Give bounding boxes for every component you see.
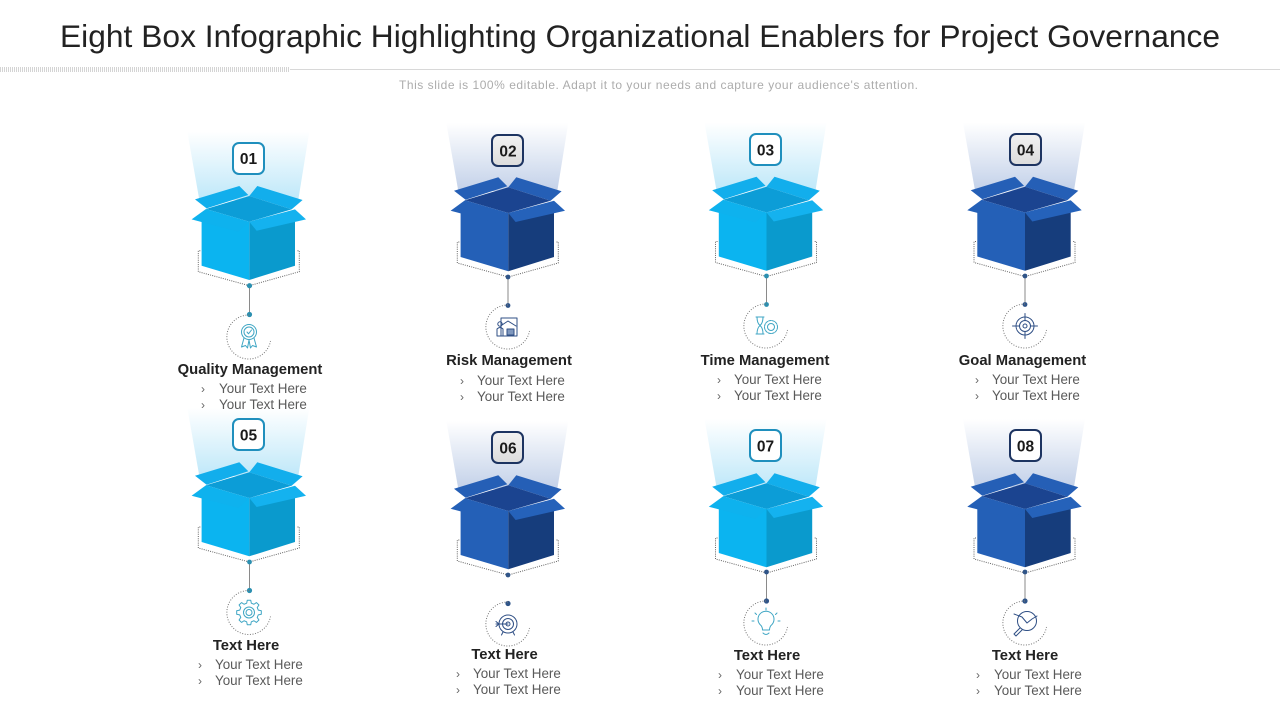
label 02: Risk Management — [446, 353, 572, 369]
label 05: Text Here — [213, 638, 279, 654]
list 01: › — [201, 382, 205, 396]
box 06 — [446, 421, 568, 575]
list 03: Your Text Here — [734, 388, 822, 403]
list 07: › — [718, 684, 722, 698]
list 05: Your Text Here — [215, 673, 303, 688]
list 07: › — [718, 668, 722, 682]
panel: 01 Quality Management — [178, 132, 322, 412]
list 03 — [717, 372, 822, 403]
label 06: Text Here — [471, 647, 538, 663]
list 06: Your Text Here — [473, 682, 561, 697]
badge 04: 04 — [1017, 142, 1034, 160]
badge 01 — [233, 143, 264, 174]
box 02 — [446, 123, 568, 277]
list 07: Your Text Here — [736, 667, 824, 682]
badge 05: 05 — [240, 428, 257, 444]
label 01: Quality Management — [178, 362, 322, 378]
connector 03 — [764, 274, 769, 307]
box 05 — [187, 408, 309, 562]
badge 02 — [492, 135, 523, 166]
list 02 — [460, 373, 565, 404]
box 04 — [963, 122, 1085, 276]
badge 06 — [492, 432, 523, 463]
connector 02 — [506, 275, 510, 308]
list 02: › — [460, 390, 464, 404]
icon: arrow target — [486, 602, 530, 646]
title: Eight Box Infographic Highlighting Organizational Enablers for Project Governance — [60, 18, 1220, 54]
label 04: Goal Management — [959, 353, 1086, 369]
panel: 07 Text Here — [704, 419, 826, 698]
box 07 — [704, 419, 826, 573]
badge 03: 03 — [757, 142, 774, 160]
badge 01: 01 — [240, 151, 257, 168]
list 01: Your Text Here — [219, 397, 307, 412]
list 05: › — [198, 658, 202, 672]
badge 08: 08 — [1017, 438, 1034, 456]
connector 07 — [764, 570, 769, 604]
icon: hourglass and gear — [744, 304, 788, 348]
connector 01 — [247, 283, 252, 317]
connector 04 — [1023, 274, 1027, 307]
box 03 — [704, 122, 826, 276]
badge 04 — [1010, 134, 1041, 165]
badge 02: 02 — [499, 144, 517, 160]
icon: risk chart with person — [486, 305, 530, 349]
list 08: › — [976, 668, 980, 682]
list 05 — [198, 657, 303, 688]
list 01 — [201, 381, 307, 412]
label 03: Time Management — [701, 353, 829, 369]
list 04: Your Text Here — [992, 372, 1080, 387]
icon: award ribbon — [227, 315, 270, 359]
list 05: › — [198, 674, 202, 688]
list 07 — [718, 667, 824, 698]
badge 05 — [233, 419, 264, 450]
label 08: Text Here — [992, 648, 1058, 664]
list 02: › — [460, 374, 464, 388]
badge 07 — [750, 430, 781, 461]
list 04 — [975, 372, 1080, 403]
icon: light bulb — [744, 601, 788, 645]
icon: gear — [227, 590, 270, 634]
badge 06: 06 — [499, 440, 517, 458]
badge 07: 07 — [757, 438, 774, 456]
list 04: › — [975, 373, 979, 387]
list 08: Your Text Here — [994, 683, 1082, 698]
list 08: › — [976, 684, 980, 698]
list 04: › — [975, 389, 979, 403]
list 03: › — [717, 373, 721, 387]
box 01 — [187, 132, 309, 286]
panel: 05 Text Here — [187, 408, 309, 688]
list 06: Your Text Here — [473, 666, 561, 681]
label 07: Text Here — [734, 648, 800, 664]
subtitle: This slide is 100% editable. Adapt it to your needs and capture your audience's attention. — [399, 78, 918, 92]
list 02: Your Text Here — [477, 389, 565, 404]
box 08 — [963, 419, 1085, 573]
list 03: Your Text Here — [734, 372, 822, 387]
list 06: › — [456, 683, 460, 697]
icon: magnifier with trend — [1003, 601, 1046, 645]
badge 08 — [1010, 430, 1041, 461]
badge 03 — [750, 134, 781, 165]
panel: 08 Text Here — [963, 419, 1085, 698]
connector 06 — [505, 573, 511, 606]
icon: crosshair target — [1003, 304, 1046, 348]
list 08 — [976, 667, 1082, 698]
connector 08 — [1022, 570, 1028, 604]
list 01: Your Text Here — [219, 381, 307, 396]
panel: 02 Risk Management — [446, 123, 572, 404]
list 08: Your Text Here — [994, 667, 1082, 682]
panel: 04 Goal Management — [959, 122, 1086, 403]
list 07: Your Text Here — [736, 683, 824, 698]
panel: 03 Time Management — [701, 122, 829, 403]
header rule — [0, 67, 1280, 72]
panel: 06 Text Here — [446, 421, 568, 697]
list 01: › — [201, 398, 205, 412]
list 05: Your Text Here — [215, 657, 303, 672]
list 04: Your Text Here — [992, 388, 1080, 403]
list 06: › — [456, 667, 460, 681]
list 06 — [456, 666, 561, 697]
list 03: › — [717, 389, 721, 403]
connector 05 — [247, 560, 252, 593]
list 02: Your Text Here — [477, 373, 565, 388]
